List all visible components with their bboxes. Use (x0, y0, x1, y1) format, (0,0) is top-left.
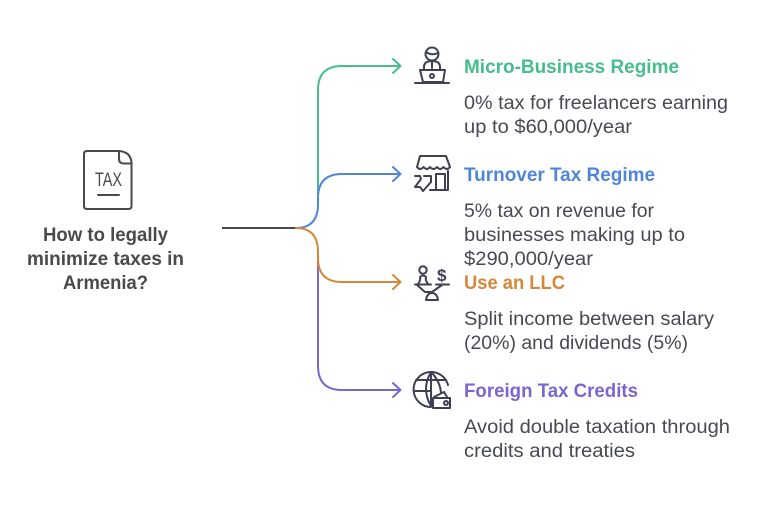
heading: turnover: Turnover Tax Regime (464, 165, 655, 186)
arrow: orange to llc (296, 228, 400, 289)
icon: globe with wallet (414, 372, 450, 408)
title: How to legally (43, 225, 168, 246)
title: Armenia? (63, 273, 148, 294)
text: turnover description: businesses making up to (464, 225, 685, 246)
text: foreign tax credits description: Avoid double taxation through (464, 417, 730, 438)
text: turnover description (464, 201, 685, 270)
icon: tax document (84, 151, 132, 209)
text: foreign tax credits description (464, 417, 730, 462)
text: turnover description: $290,000/year (464, 249, 594, 270)
text: llc description: Split income between salary (464, 309, 715, 330)
icon: balance scale (415, 266, 449, 300)
heading: micro-business: Micro-Business Regime (464, 57, 679, 78)
text: micro-business description: up to $60,000/year (464, 117, 633, 138)
heading: foreign tax credits: Foreign Tax Credits (464, 381, 638, 402)
heading: llc: Use an LLC (464, 273, 565, 294)
arrow: blue to turnover tax (296, 167, 400, 228)
icon: storefront (415, 156, 450, 191)
text: micro-business description (464, 93, 728, 138)
icon: balance scale: $ (437, 266, 447, 285)
text: micro-business description: 0% tax for freelancers earning (464, 93, 728, 114)
title (27, 225, 184, 294)
text: turnover description: 5% tax on revenue for (464, 201, 655, 222)
title: minimize taxes in (27, 249, 184, 270)
connector: stem (222, 227, 297, 229)
text: foreign tax credits description: credits and treaties (464, 441, 635, 462)
arrow: purple to foreign tax credits (318, 261, 400, 397)
arrow: green to micro-business (318, 59, 400, 195)
icon: freelancer at laptop (415, 48, 449, 83)
text: llc description (464, 309, 715, 354)
text: llc description: (20%) and dividends (5%) (464, 333, 688, 354)
icon: tax document: TAX (95, 170, 122, 191)
